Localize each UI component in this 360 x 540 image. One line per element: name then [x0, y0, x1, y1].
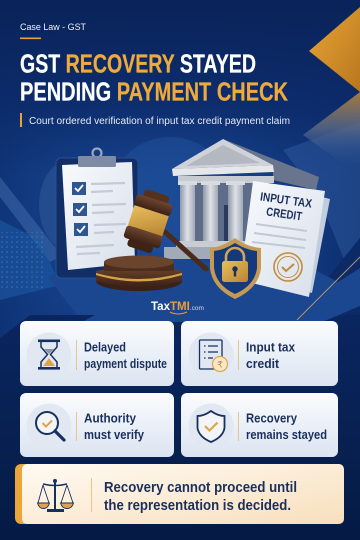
- icon: shield check: [198, 411, 224, 442]
- title: GST RECOVERY STAYED: [20, 48, 256, 78]
- subtitle: Court ordered verification of input tax credit payment claim: [29, 116, 290, 127]
- banner: conclusion: Recovery cannot proceed until: [104, 479, 297, 496]
- card: authority must verify: [20, 393, 174, 457]
- icon: gavel: [96, 187, 206, 291]
- title: [20, 48, 288, 106]
- card: recovery remains stayed: Recovery: [246, 412, 297, 426]
- accent line: [297, 257, 360, 320]
- card: authority must verify: Authority: [84, 412, 136, 426]
- card: recovery remains stayed: [181, 393, 338, 457]
- table surface: [48, 262, 360, 322]
- card: delayed payment dispute: [20, 321, 174, 386]
- icon: input tax credit document: [240, 181, 330, 297]
- icon: courthouse: [164, 139, 319, 259]
- card: input tax credit: Input tax: [246, 340, 295, 354]
- icon: magnifier: [36, 412, 64, 440]
- icon: ledger with rupee coin: [200, 340, 228, 372]
- card: delayed payment dispute: Delayed: [84, 340, 126, 354]
- icon: clipboard checklist: [56, 148, 138, 278]
- icon: input tax credit document: INPUT TAX: [259, 190, 313, 211]
- eyebrow: case law: [20, 22, 86, 39]
- logo: TaxTMI: TaxTMI.com: [151, 301, 204, 313]
- icon: ledger with rupee coin: ₹: [217, 360, 223, 370]
- icon: scales of justice: [38, 479, 74, 512]
- card: recovery remains stayed: remains stayed: [246, 428, 327, 442]
- card: input tax credit: [181, 321, 338, 386]
- card: input tax credit: credit: [246, 357, 280, 371]
- banner: conclusion: [15, 464, 344, 524]
- lower dark panel: [0, 315, 360, 540]
- icon: hourglass: [38, 340, 60, 370]
- icon: input tax credit document: CREDIT: [265, 205, 303, 223]
- card: delayed payment dispute: payment dispute: [84, 357, 167, 371]
- orange corner diamond: [303, 7, 360, 165]
- eyebrow: case law: Case Law - GST: [20, 22, 86, 33]
- banner: conclusion: the representation is decided.: [104, 497, 291, 514]
- title: PENDING PAYMENT CHECK: [20, 76, 288, 106]
- card: authority must verify: must verify: [84, 428, 144, 442]
- icon: padlock shield: [210, 238, 261, 299]
